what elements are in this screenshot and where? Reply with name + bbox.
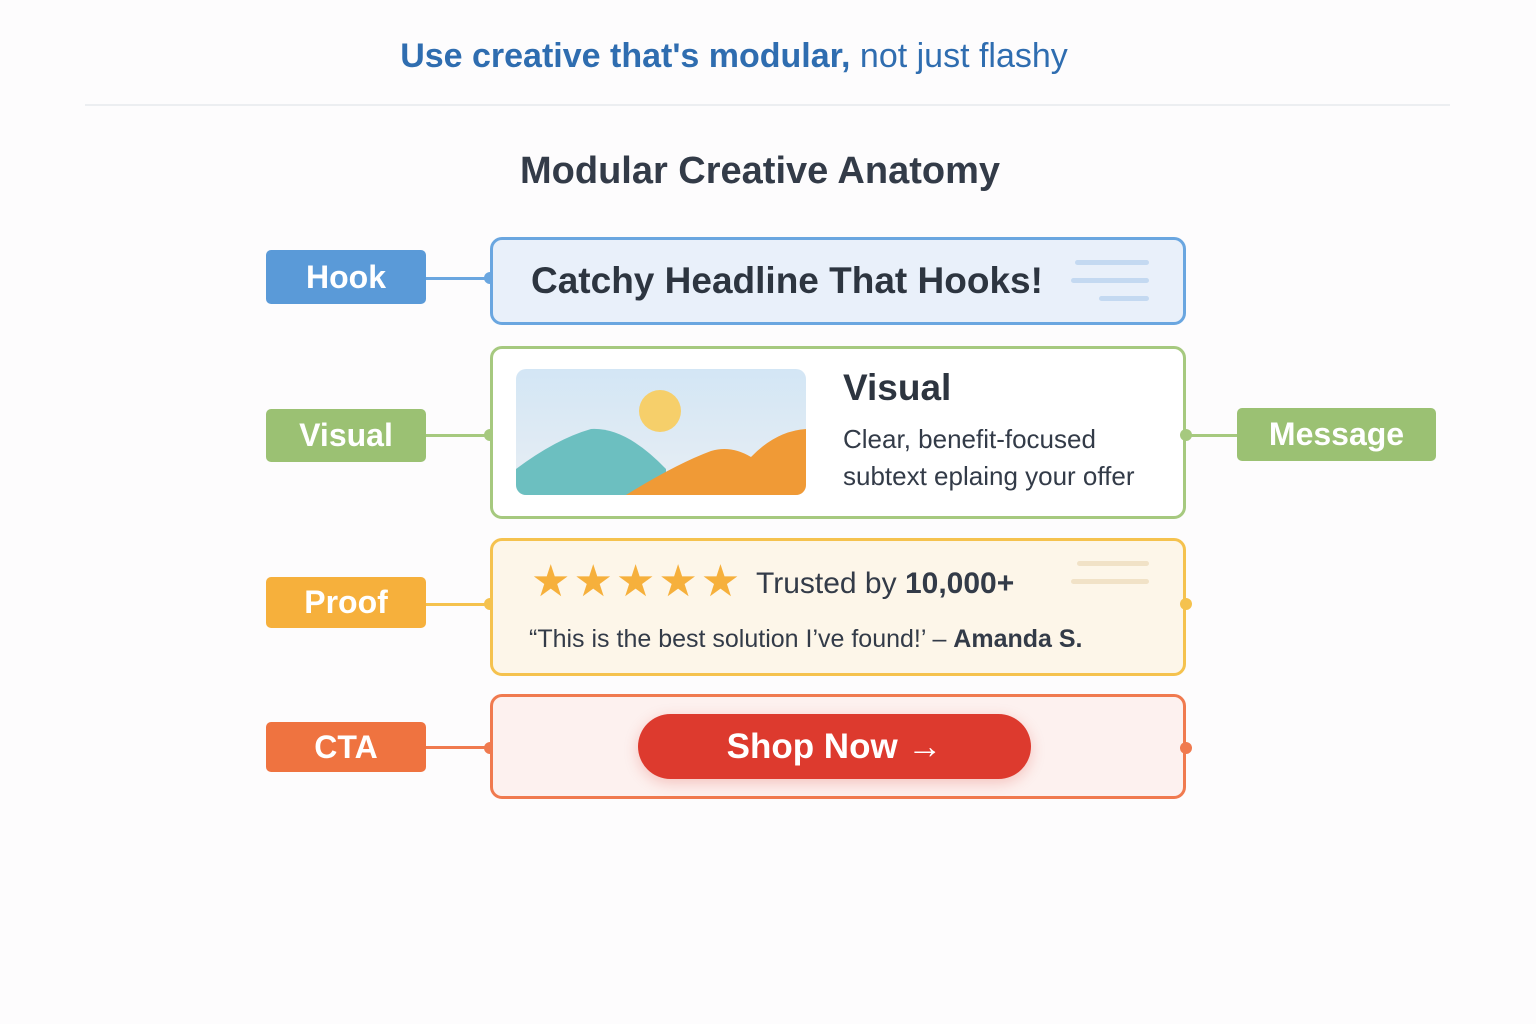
panel: proof: [490, 538, 1186, 676]
label: CTA: CTA: [314, 728, 378, 764]
subtitle: Modular Creative Anatomy: [520, 150, 1000, 192]
stars: ★★★★★: [531, 557, 743, 606]
panel: CTA: [490, 694, 1186, 799]
panel: visual + message: [490, 346, 1186, 519]
label: Proof: [266, 577, 426, 628]
label: Hook: Hook: [306, 258, 386, 294]
label: CTA: [266, 722, 426, 772]
message text: subtext eplaing your offer: [843, 461, 1134, 491]
title: Use creative that's modular, not just flashy: [400, 37, 1068, 75]
label: Message: [1237, 408, 1436, 461]
heading: Visual: Visual: [843, 367, 951, 408]
image illustration: [516, 369, 806, 495]
decorative lines: [1071, 561, 1149, 584]
label: Message: Message: [1269, 416, 1404, 452]
label: Hook: [266, 250, 426, 304]
label: Visual: Visual: [299, 417, 393, 453]
label: Proof: Proof: [304, 584, 388, 620]
headline text: Catchy Headline That Hooks!: [531, 260, 1043, 301]
label: Visual: [266, 409, 426, 462]
panel: hook headline: [490, 237, 1186, 325]
trusted text: Trusted by 10,000+: [756, 567, 1014, 600]
message text: Clear, benefit-focused: [843, 424, 1096, 454]
button: Shop Now: [638, 714, 1031, 779]
decorative lines: [1071, 260, 1149, 301]
message text: [843, 424, 1134, 491]
button: Shop Now: Shop Now →: [727, 726, 942, 766]
testimonial quote: “This is the best solution I’ve found!’ – Amanda S.: [529, 625, 1082, 653]
